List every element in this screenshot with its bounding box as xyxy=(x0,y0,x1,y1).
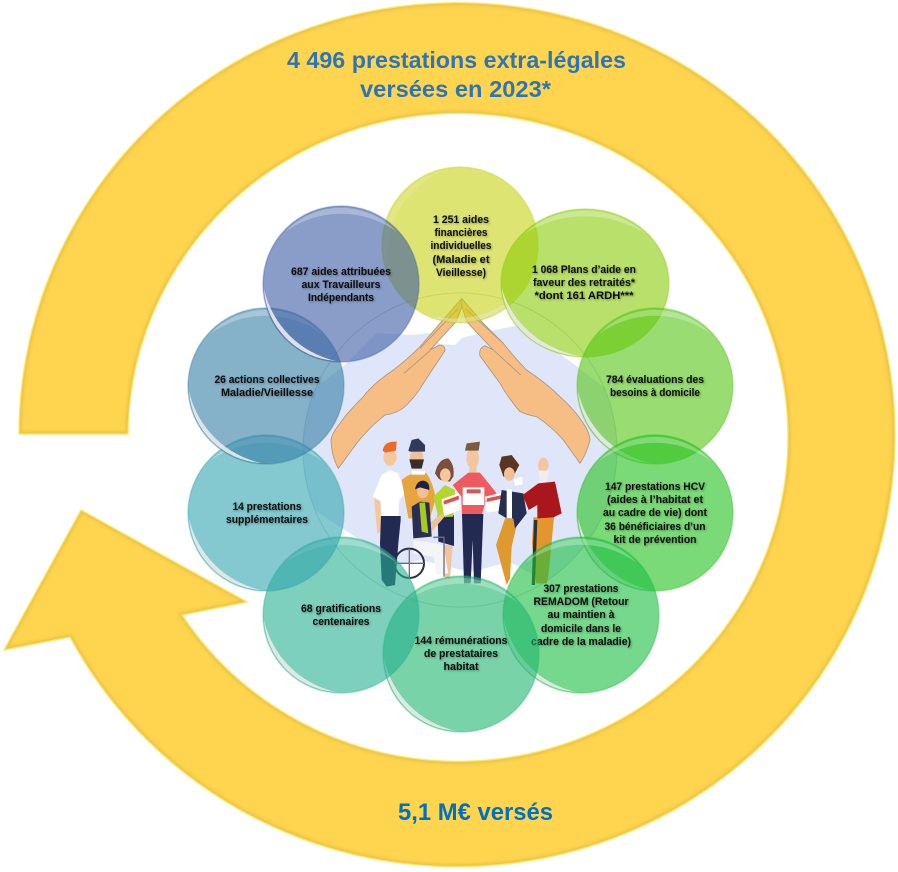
bubble: aides financières individuelles: Vieillesse) xyxy=(436,267,486,279)
bubble: évaluations des besoins: besoins à domicile xyxy=(610,387,700,399)
total amount label: 5,1 M€ versés xyxy=(398,799,553,826)
bubble: prestations HCV: 36 bénéficiaires d’un xyxy=(604,521,706,533)
bubble: évaluations des besoins xyxy=(577,308,733,464)
bubble: évaluations des besoins: 784 évaluations des xyxy=(606,374,704,386)
bubble: prestations HCV: (aides à l’habitat et xyxy=(607,494,703,506)
bubble: rémunérations de prestataires habitat: habitat xyxy=(444,661,479,673)
person: man in red sweater xyxy=(453,442,503,583)
bubble: actions collectives xyxy=(188,308,344,464)
bubble: rémunérations de prestataires habitat xyxy=(383,576,539,732)
bubble: prestations REMADOM: 307 prestations xyxy=(544,583,618,595)
bubble: prestations HCV: kit de prévention xyxy=(614,534,697,546)
people xyxy=(373,438,562,587)
bubble: prestations REMADOM: REMADOM (Retour xyxy=(534,596,629,608)
illustration background xyxy=(304,326,616,580)
bubble: prestations REMADOM: au maintien à xyxy=(548,609,615,621)
bubble: aides aux Travailleurs Indépendants: 687 aides attribuées xyxy=(291,266,391,278)
bubble: gratifications centenaires: centenaires xyxy=(312,616,370,628)
bubble: rémunérations de prestataires habitat: de prestataires xyxy=(424,648,498,660)
person: woman in green top xyxy=(433,458,461,578)
bubble: aides financières individuelles: financières xyxy=(434,227,488,239)
bubble: plans d'aide xyxy=(501,209,669,357)
bubble: prestations HCV xyxy=(577,435,733,591)
central illustration: hands sheltering people xyxy=(300,290,620,610)
bubble: aides financières individuelles: (Maladie et xyxy=(432,254,490,266)
title: versées en 2023* xyxy=(360,76,551,102)
bubble: plans d'aide: faveur des retraités* xyxy=(533,277,636,289)
bubble: prestations supplémentaires xyxy=(188,435,344,591)
bubble: prestations REMADOM: cadre de la maladie) xyxy=(531,636,631,648)
bubble: prestations HCV: 147 prestations HCV xyxy=(605,481,706,493)
person: man in white shirt xyxy=(373,442,405,587)
bubble: prestations supplémentaires: 14 prestations xyxy=(232,501,302,513)
bubble: actions collectives: 26 actions collectives xyxy=(214,374,320,386)
hands xyxy=(331,298,590,468)
bubble: gratifications centenaires xyxy=(263,537,419,693)
bubble: plans d'aide: *dont 161 ARDH*** xyxy=(534,290,634,302)
person: bearded man in orange sweater xyxy=(402,438,436,518)
right hand xyxy=(461,298,590,463)
bubble: aides aux Travailleurs Indépendants xyxy=(263,206,419,362)
bubble: aides financières individuelles: individuelles xyxy=(430,240,492,252)
illustration outline xyxy=(303,293,617,607)
bubble: rémunérations de prestataires habitat: 144 rémunérations xyxy=(414,635,508,647)
bubble: plans d'aide: 1 068 Plans d’aide en xyxy=(532,264,636,276)
person: woman in wheelchair xyxy=(395,481,448,578)
left hand xyxy=(331,298,463,468)
person: woman in navy jacket xyxy=(496,455,527,585)
bubble: prestations REMADOM: domicile dans le xyxy=(541,623,621,635)
bubble: aides financières individuelles xyxy=(356,158,555,350)
bubble: aides financières individuelles: 1 251 aides xyxy=(433,214,489,226)
title xyxy=(287,47,626,102)
bubble: gratifications centenaires: 68 gratifications xyxy=(301,603,381,615)
bubble: prestations supplémentaires: supplémentaires xyxy=(226,514,308,526)
title: 4 496 prestations extra-légales xyxy=(287,47,626,73)
person: old man with cane xyxy=(523,458,562,585)
bubble: aides aux Travailleurs Indépendants: aux Travailleurs xyxy=(302,279,380,291)
bubble: prestations REMADOM xyxy=(503,537,659,693)
bubble: actions collectives: Maladie/Vieillesse xyxy=(221,387,313,399)
bubble: prestations HCV: au cadre de vie) dont xyxy=(603,507,707,519)
bubble: aides aux Travailleurs Indépendants: Indépendants xyxy=(308,292,374,304)
